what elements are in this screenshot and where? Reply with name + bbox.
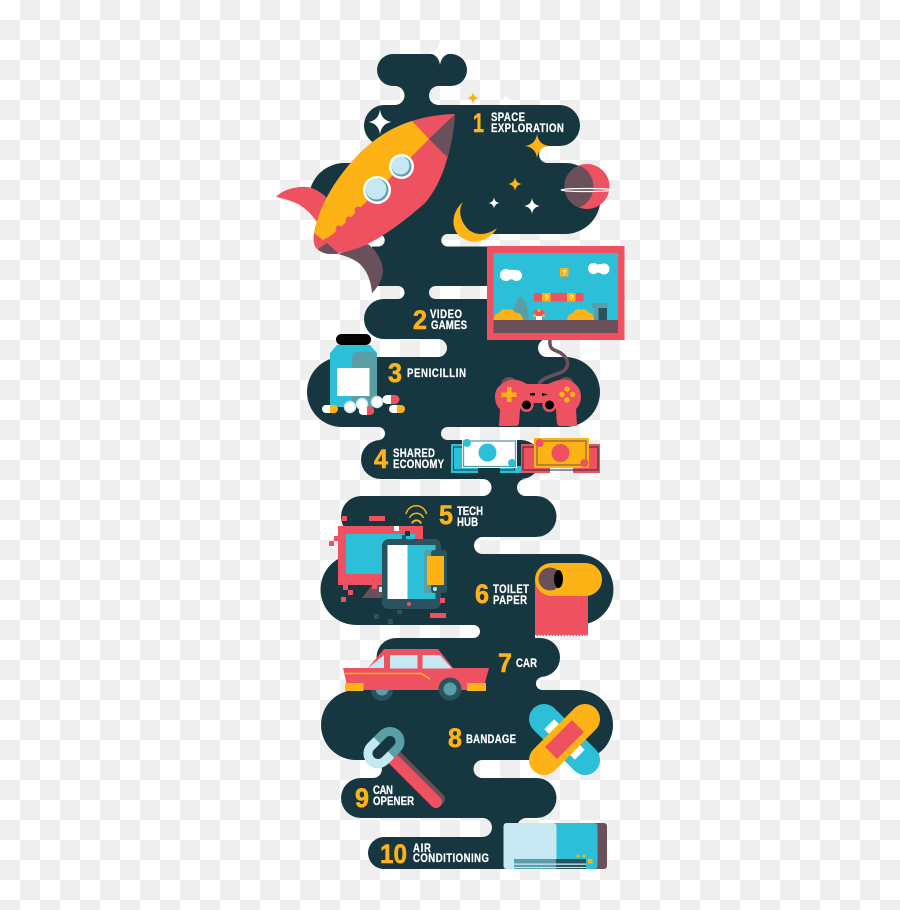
label 10: air conditioning: AIR <box>413 842 431 855</box>
label 2: video games: 2 <box>413 305 427 335</box>
label 10: air conditioning: CONDITIONING <box>413 852 489 865</box>
icon: monitor, tablet and phone <box>329 516 447 624</box>
icon: question marks: ? <box>562 270 566 277</box>
label 7: car: 7 <box>498 648 512 678</box>
icon: yellow banknote <box>521 438 600 473</box>
label 4: shared economy: ECONOMY <box>393 458 445 471</box>
label 3: penicillin: PENICILLIN <box>407 367 466 380</box>
label 9: can opener: 9 <box>355 783 369 813</box>
label 7: car: CAR <box>516 657 537 670</box>
icon: crossed bandages <box>523 698 606 781</box>
icon: question marks: ? <box>570 295 574 302</box>
label 4: shared economy: 4 <box>374 444 388 474</box>
label 3: penicillin <box>388 358 466 388</box>
icon: car <box>343 649 489 701</box>
icon: wifi signal <box>406 506 426 524</box>
label 10: air conditioning <box>380 839 489 869</box>
label 6: toilet paper <box>475 579 529 609</box>
icon: stars <box>368 41 549 214</box>
label 7: car <box>498 648 537 678</box>
label 9: can opener: CAN <box>373 784 393 797</box>
label 1: space exploration: 1 <box>473 108 484 138</box>
label 5: tech hub: HUB <box>457 516 478 529</box>
winding dark path background <box>307 54 613 869</box>
icon: medicine bottle and pills <box>322 334 405 415</box>
label 6: toilet paper: PAPER <box>493 594 527 607</box>
label 10: air conditioning: 10 <box>380 839 407 869</box>
icon: question marks: ? <box>544 295 549 302</box>
label 4: shared economy <box>374 444 445 474</box>
label 8: bandage: BANDAGE <box>466 733 516 746</box>
label 5: tech hub: TECH <box>457 505 483 518</box>
label 8: bandage: 8 <box>448 723 462 753</box>
label 2: video games <box>413 305 467 335</box>
label 9: can opener: OPENER <box>373 795 414 808</box>
label 2: video games: GAMES <box>431 319 467 332</box>
icon: game tv screen <box>487 246 624 340</box>
label 6: toilet paper: 6 <box>475 579 489 609</box>
icon: rocket <box>276 114 455 293</box>
icon: crescent moon <box>453 202 497 242</box>
label 8: bandage <box>448 723 516 753</box>
label 6: toilet paper: TOILET <box>493 583 529 596</box>
icon: air conditioner <box>504 823 607 869</box>
icon: ringed planet <box>560 164 612 209</box>
label 5: tech hub: 5 <box>439 500 453 530</box>
icon: can opener <box>357 721 439 802</box>
label 1: space exploration: SPACE <box>491 111 525 124</box>
label 4: shared economy: SHARED <box>393 447 435 460</box>
icon: game controller <box>495 340 581 426</box>
icon: blue banknote <box>451 439 533 473</box>
icon: toilet paper roll <box>535 563 602 636</box>
label 1: space exploration <box>473 108 564 138</box>
icon: question marks <box>544 270 574 302</box>
label 1: space exploration: EXPLORATION <box>491 122 564 135</box>
label 9: can opener <box>355 783 414 813</box>
label 3: penicillin: 3 <box>388 358 402 388</box>
label 2: video games: VIDEO <box>430 308 462 321</box>
label 5: tech hub <box>439 500 483 530</box>
